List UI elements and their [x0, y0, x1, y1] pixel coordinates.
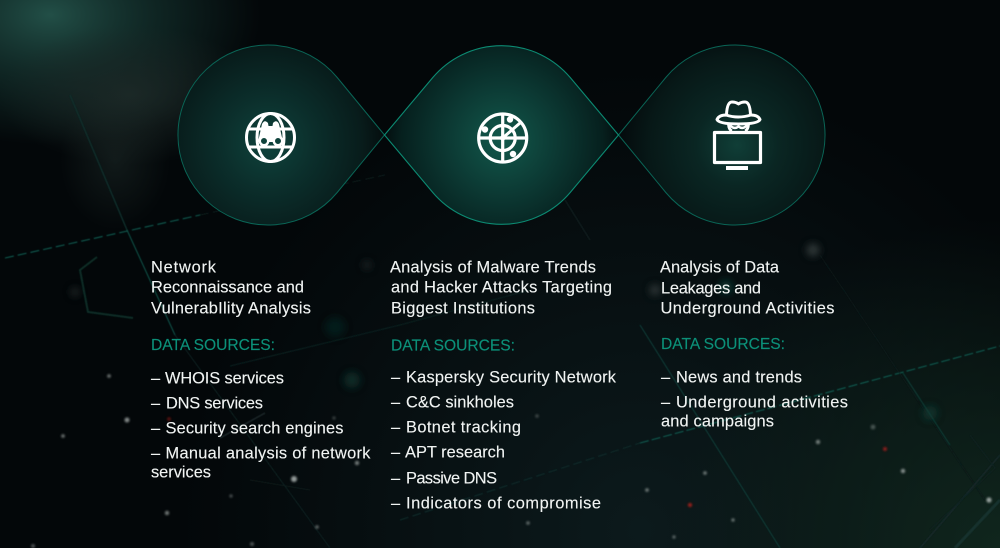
heading: [390, 259, 612, 317]
list of sources: DNS services: [166, 395, 263, 413]
list of sources: –: [661, 369, 671, 387]
list of sources: –: [391, 394, 401, 412]
heading: and Hacker Attacks Targeting: [391, 279, 612, 297]
list of sources: C&C sinkholes: [406, 394, 514, 412]
heading: Network: [151, 259, 217, 277]
list of sources: [661, 369, 848, 431]
icon: hacker behind monitor: [714, 102, 760, 170]
list of sources: –: [391, 495, 401, 513]
list of sources: and campaigns: [661, 413, 774, 431]
list of sources: [391, 369, 617, 513]
column 3: data leakages: [660, 259, 848, 431]
list of sources: APT research: [405, 444, 505, 462]
list of sources: Security search engines: [166, 420, 344, 438]
label: data sources: DATA SOURCES:: [391, 338, 515, 355]
heading: Biggest Institutions: [391, 299, 535, 317]
loop: middle: [384, 46, 618, 224]
column 1: network reconnaissance: [151, 259, 371, 481]
list of sources: –: [151, 395, 161, 413]
loop: left: [178, 45, 384, 225]
list of sources: [151, 370, 371, 481]
heading: [660, 259, 834, 317]
heading: Analysis of Malware Trends: [390, 259, 596, 277]
list of sources: –: [151, 370, 161, 388]
list of sources: –: [151, 445, 161, 463]
loop: right: [618, 45, 825, 225]
heading: [151, 259, 311, 317]
list of sources: Underground activities: [676, 394, 848, 412]
list of sources: News and trends: [676, 369, 802, 387]
column 2: malware trends: [390, 259, 617, 513]
list of sources: –: [151, 420, 161, 438]
list of sources: Passive DNS: [406, 470, 497, 488]
list of sources: services: [151, 463, 211, 481]
list of sources: Manual analysis of network: [166, 445, 371, 463]
label: data sources: DATA SOURCES:: [151, 337, 275, 354]
infinity-chain loops: [178, 45, 825, 225]
list of sources: –: [661, 394, 671, 412]
heading: VulnerabIlity Analysis: [151, 299, 311, 317]
icon: globe with binoculars: [246, 114, 294, 162]
heading: Leakages and: [661, 279, 761, 297]
heading: Analysis of Data: [660, 259, 780, 277]
label: data sources: DATA SOURCES:: [661, 336, 785, 353]
list of sources: –: [391, 369, 401, 387]
list of sources: Botnet tracking: [406, 419, 521, 437]
list of sources: WHOIS services: [165, 370, 284, 388]
heading: Reconnaissance and: [151, 279, 304, 297]
icon: radar: [479, 114, 527, 162]
heading: Underground Activities: [660, 299, 834, 317]
list of sources: Kaspersky Security Network: [406, 369, 617, 387]
list of sources: –: [391, 444, 401, 462]
list of sources: Indicators of compromise: [406, 495, 601, 513]
list of sources: –: [391, 419, 401, 437]
list of sources: –: [391, 470, 401, 488]
